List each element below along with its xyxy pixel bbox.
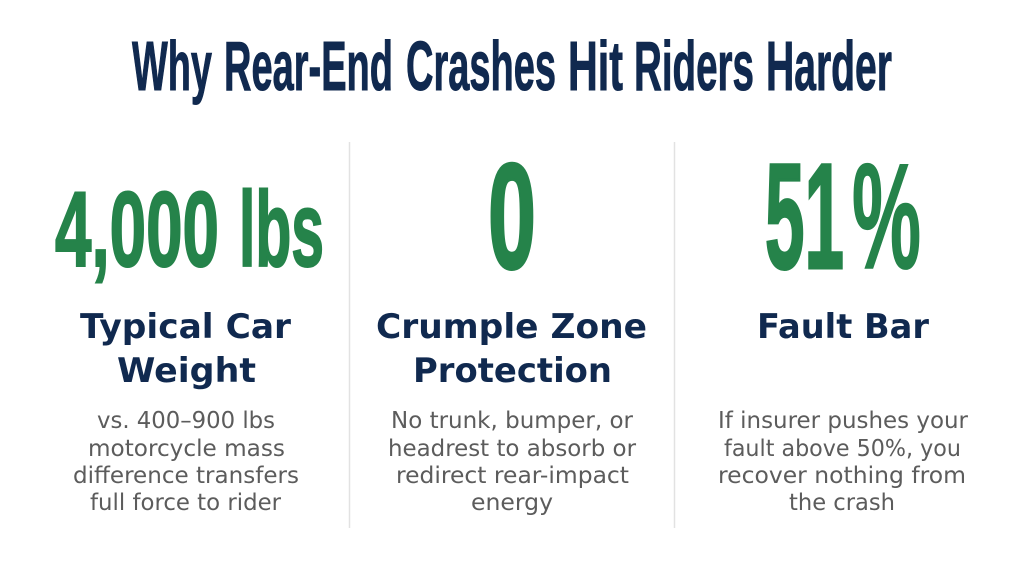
text: mass difference [73,408,299,516]
text: no trunk: No trunk, bumper, or [391,408,634,434]
text: insurer fault: the crash [789,490,895,516]
text: no trunk: headrest to absorb or [388,436,637,462]
heading: fault bar: Fault Bar [757,307,929,347]
title [132,27,892,105]
heading: crumple zone protection: Protection [413,351,612,391]
text: no trunk: redirect rear-impact [396,463,629,489]
heading: typical car weight [80,307,291,391]
stat: 51%: % [852,132,921,300]
title: Harder [766,27,892,105]
text: no trunk [388,408,637,516]
title: Crashes [406,27,556,105]
stat: 4,000 lbs: 4,000 [55,169,219,289]
title: Why [132,27,212,105]
text: mass difference: difference transfers [73,463,299,489]
text: insurer fault [718,408,969,516]
stat: 0: 0 [488,132,536,300]
text: mass difference: full force to rider [90,490,282,516]
stat: 4,000 lbs: lbs [239,169,324,289]
text: mass difference: vs. 400–900 lbs [97,408,275,434]
title: Hit [568,27,623,105]
text: insurer fault: If insurer pushes your [718,408,969,434]
text: no trunk: energy [471,490,553,516]
heading: crumple zone protection: Crumple Zone [376,307,647,347]
heading: typical car weight: Weight [117,351,256,391]
stat: 51%: 51 [765,132,844,300]
title: Riders [634,27,754,105]
text: insurer fault: recover nothing from [718,463,966,489]
panel: fault bar [718,132,969,516]
text: insurer fault: fault above 50%, you [724,436,961,462]
text: mass difference: motorcycle mass [88,436,285,462]
panel: crumple zone protection [376,132,647,516]
heading: typical car weight: Typical Car [80,307,291,347]
heading: crumple zone protection [376,307,647,391]
panel: typical car weight [55,169,324,516]
title: Rear-End [224,27,393,105]
